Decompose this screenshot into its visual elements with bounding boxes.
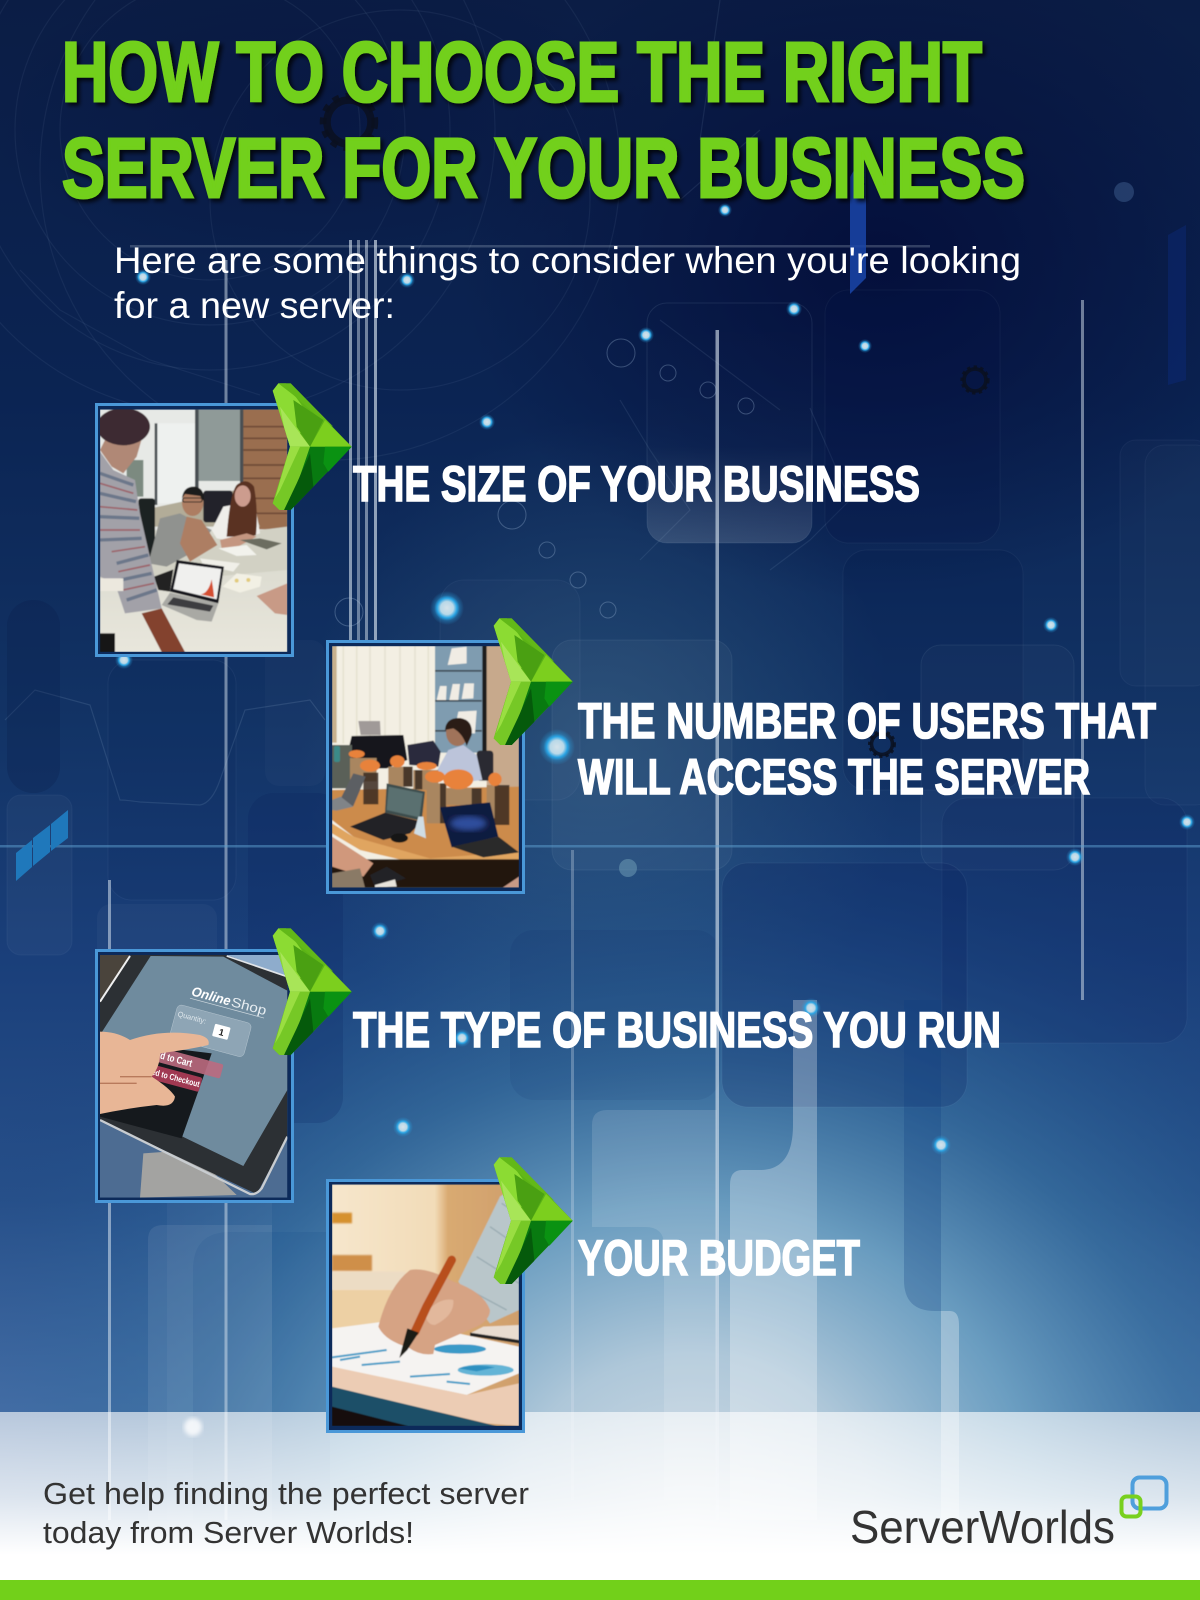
arrow 1 [273, 383, 352, 510]
heading 1: THE SIZE OF YOUR BUSINESS [353, 455, 920, 512]
footer call to action [43, 1476, 529, 1550]
arrow 4 [494, 1157, 573, 1284]
intro text: Here are some things to consider when you're looking [114, 240, 1021, 281]
photo: hand writing on charts and frame [328, 1180, 524, 1432]
heading 4: YOUR BUDGET [578, 1229, 860, 1286]
title [62, 25, 1025, 215]
photo: conference table with laptops and frame [328, 642, 524, 892]
photo: tablet online shop and frame: Quantity: [177, 1009, 207, 1026]
photo: tablet online shop and frame: Online [190, 984, 233, 1009]
photo: tablet online shop and frame: Proceed to Checkout [132, 1062, 201, 1089]
photo: tablet online shop and frame: 1 [218, 1027, 225, 1038]
photo: tablet online shop and frame: Add to Cart [149, 1048, 194, 1070]
arrow 2 [494, 618, 573, 745]
photo: tablet online shop and frame: Shop [230, 994, 268, 1018]
footer band [0, 1412, 1200, 1580]
photo: team meeting with frame [96, 404, 292, 656]
heading 3: THE TYPE OF BUSINESS YOU RUN [353, 1001, 1001, 1058]
photo: tablet online shop and frame [96, 950, 292, 1202]
footer call to action: today from Server Worlds! [43, 1515, 414, 1550]
intro text [114, 240, 1021, 326]
heading 2 [578, 692, 1156, 805]
intro text: for a new server: [114, 285, 395, 326]
logo: ServerWorlds: ServerWorlds [850, 1501, 1115, 1553]
bottom green bar [0, 1580, 1200, 1600]
logo: ServerWorlds [850, 1478, 1166, 1553]
footer call to action: Get help finding the perfect server [43, 1476, 529, 1511]
arrow 3 [273, 928, 352, 1055]
